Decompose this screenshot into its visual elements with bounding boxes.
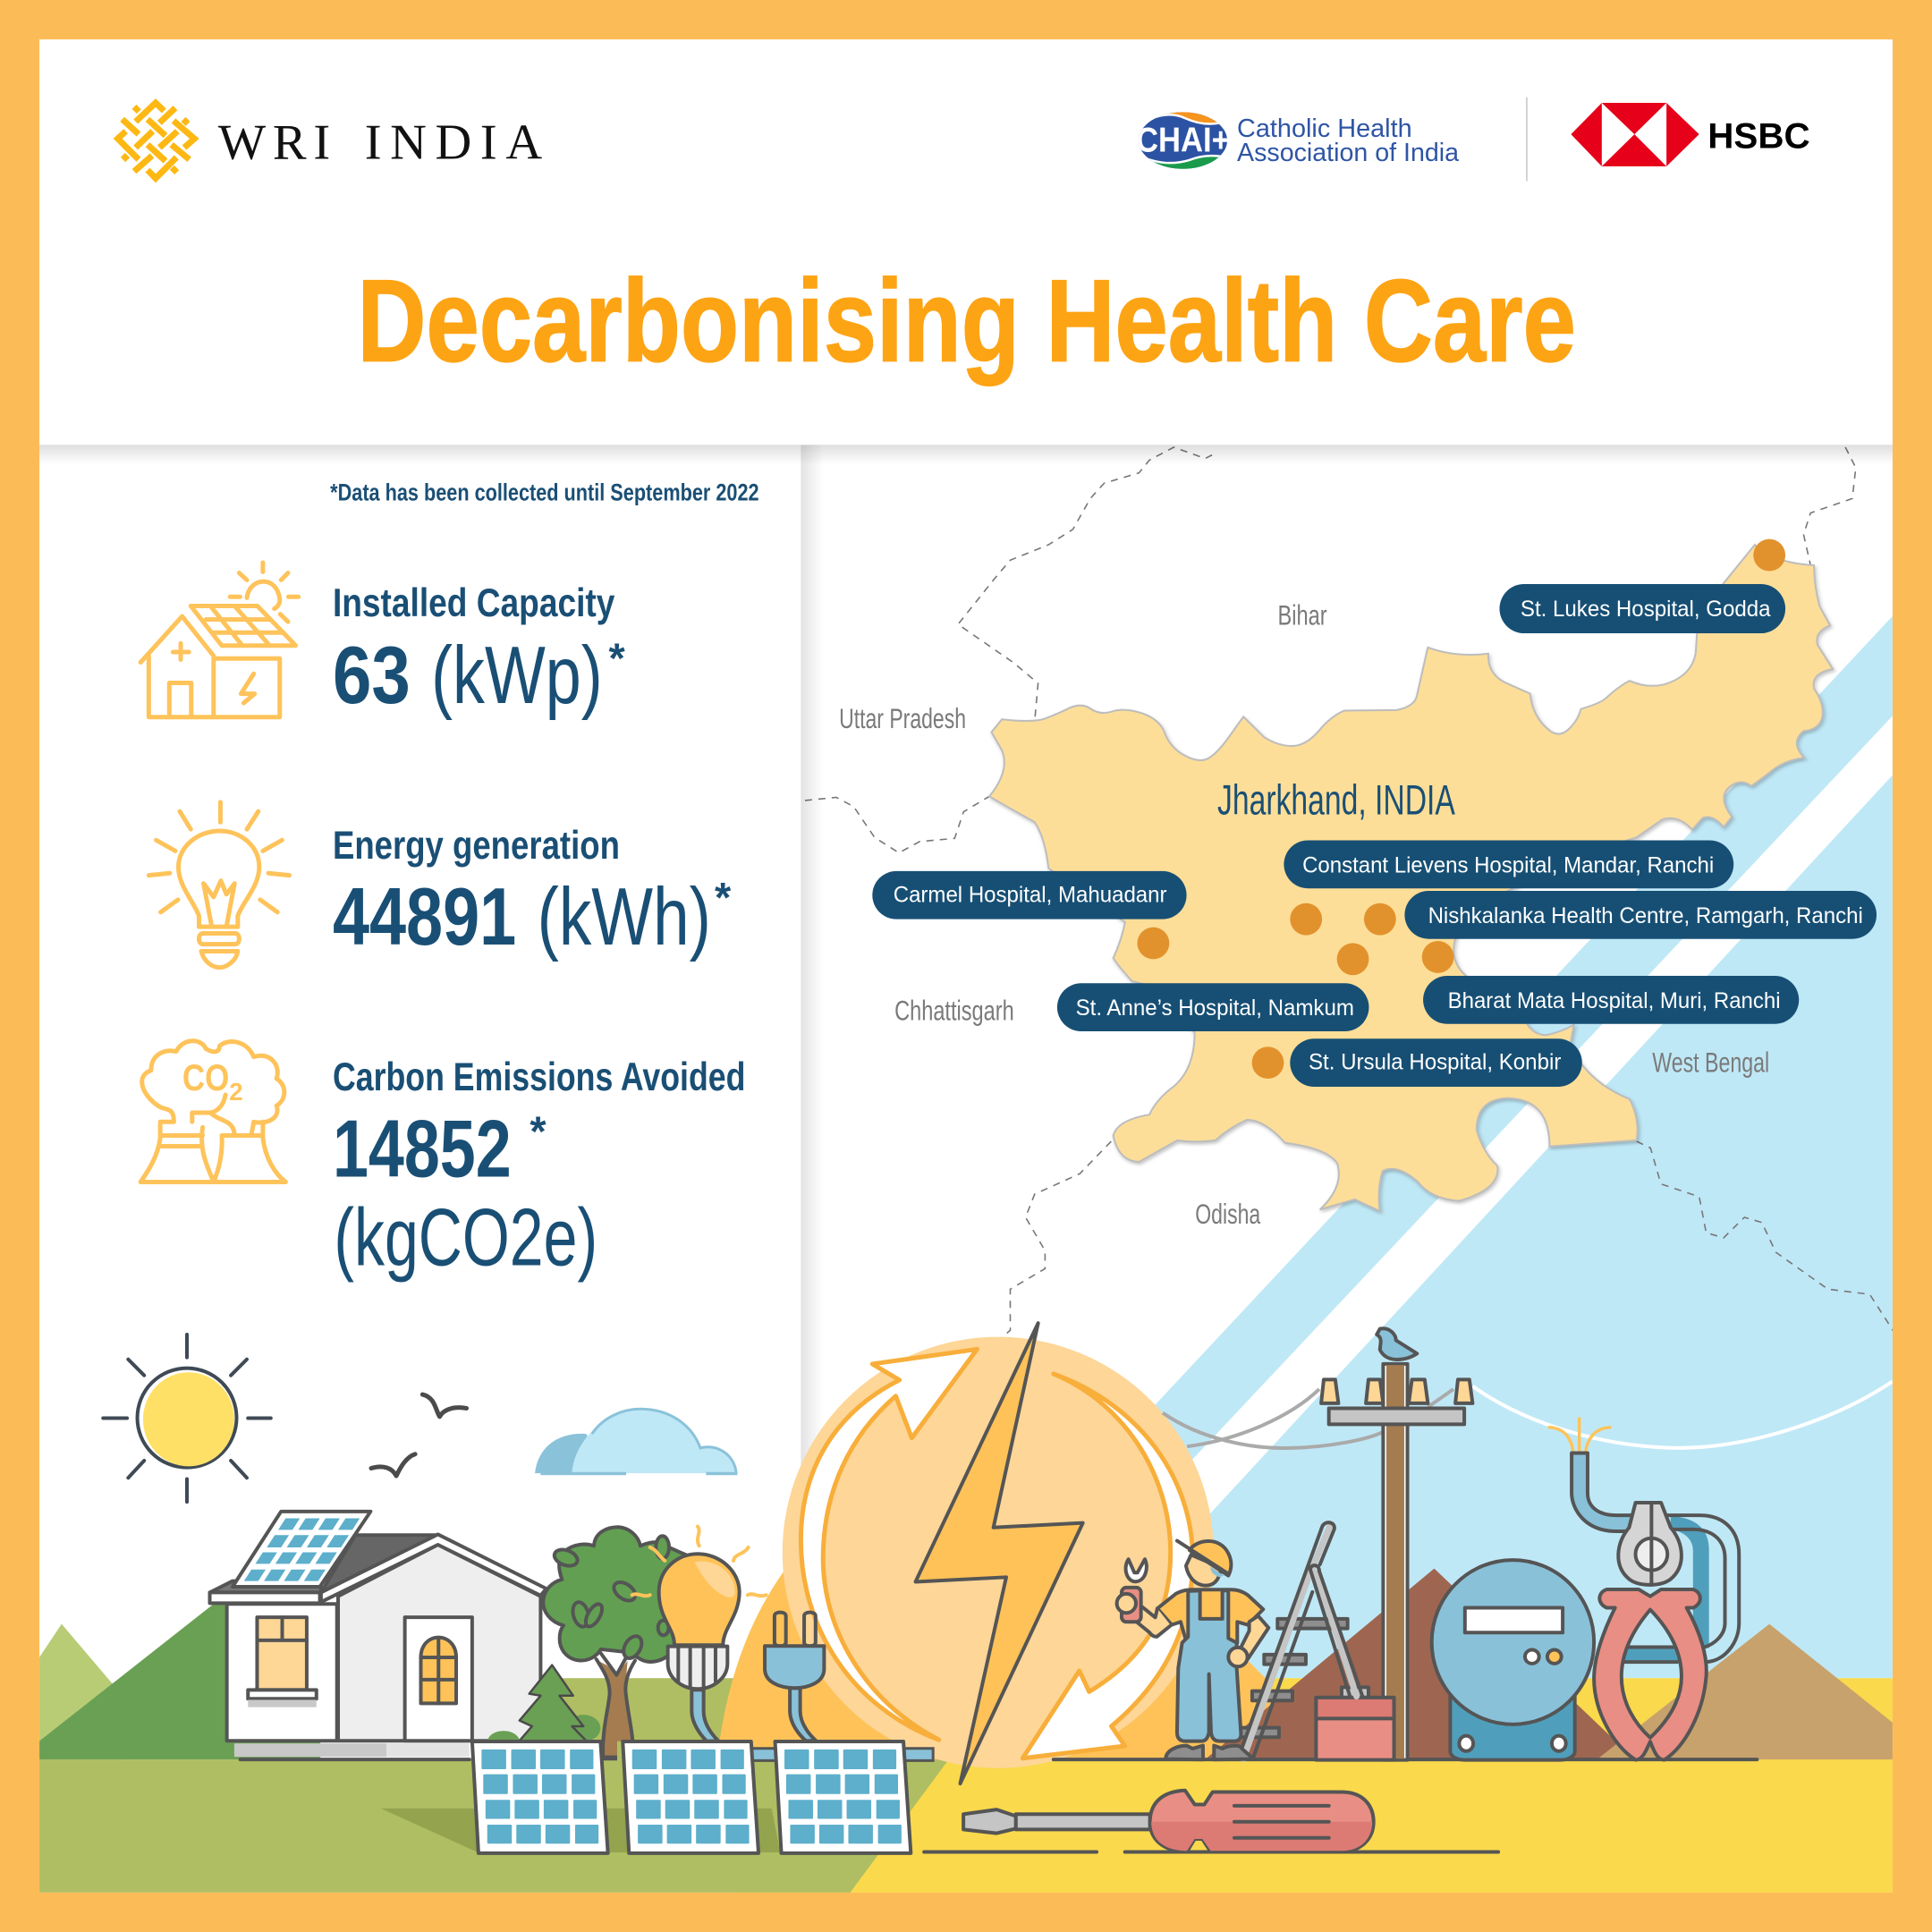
scene: orange glow behind energy circle [717,1564,1282,1759]
pill: St. Anne's Hospital: St. Anne’s Hospital, Namkum [1076,996,1354,1021]
stat: energy generation [333,823,732,962]
map: neighbouring state labels: Chhattisgarh [894,995,1014,1027]
stat: installed capacity [333,580,626,721]
panel 1 [472,1741,608,1853]
logo: WRI India: INDIA [365,114,542,170]
icon: bird on pole [1377,1328,1417,1360]
pliers [1594,1589,1707,1760]
map: neighbouring state labels: West Bengal [1652,1046,1769,1078]
cable [1572,1453,1739,1662]
small pine and bushes [487,1665,600,1752]
energy circle [783,1337,1214,1768]
stat: energy generation: Energy generation [333,823,620,868]
tree [543,1527,686,1760]
worker left arm and tool [1133,1606,1171,1637]
pill: Bharat Mata Hospital: Bharat Mata Hospital, Muri, Ranchi [1448,989,1781,1013]
screwdriver [963,1791,1374,1852]
panel 2 [623,1741,758,1853]
map: neighbouring state labels [839,598,1769,1230]
title: Decarbonising Health Care [357,256,1576,386]
header panel [39,39,1893,464]
worker shirt [1157,1589,1263,1643]
map: neighbouring state labels: Odisha [1195,1198,1261,1230]
logo: HSBC: HSBC [1707,116,1810,156]
icon: lightning bolt [916,1323,1083,1784]
icon: scene plug [765,1613,824,1741]
icon: CO2 cooling towers [140,1041,285,1182]
background: blue diagonal band [900,616,1893,1678]
map: neighbouring state labels: Bihar [1278,598,1327,631]
pill: Nishkalanka Health Centre [1404,891,1877,939]
pill: St. Ursula Hospital: St. Ursula Hospital, Konbir [1309,1051,1561,1075]
pill: Carmel Hospital [872,871,1187,919]
icon: sun [103,1335,271,1502]
cable, clamp and pliers [1549,1419,1739,1760]
stat: installed capacity: (kWp) [431,631,603,721]
stat: energy generation: * [715,874,732,920]
logo: WRI India: WRI [218,114,330,170]
electric meter [1432,1560,1594,1760]
pill: Constant Lievens Hospital: Constant Lievens Hospital, Mandar, Ranchi [1302,853,1714,877]
stat: carbon emissions avoided: * [530,1108,547,1155]
pill: Bharat Mata Hospital [1423,976,1799,1024]
pill: St. Ursula Hospital [1290,1038,1582,1087]
icon: solar house [140,563,299,717]
arrow: right circular arrow [1022,1374,1192,1758]
map: neighbouring state labels: Uttar Pradesh [839,702,966,734]
ladder [1238,1522,1362,1759]
clamp [1618,1503,1682,1585]
map: Jharkhand state shape [989,545,1833,1211]
toolbox [1316,1687,1394,1760]
logo: WRI India [118,103,542,178]
cable sparks [1549,1419,1610,1451]
stat: carbon emissions avoided: 14852 [333,1105,512,1195]
pill: St. Lukes Hospital: St. Lukes Hospital, Godda [1521,597,1771,622]
worker right arm [1241,1616,1268,1659]
logo: Catholic Health Association of India [1138,112,1460,169]
stat: installed capacity: 63 [333,631,411,721]
panel 3 [775,1741,911,1853]
stat: installed capacity: Installed Capacity [333,580,614,625]
pill: Nishkalanka Health Centre: Nishkalanka Health Centre, Ramgarh, Ranchi [1428,904,1863,928]
solar panels row [381,1741,933,1853]
pill: St. Lukes Hospital [1499,584,1785,633]
stat: carbon emissions avoided: Carbon Emissions Avoided [333,1055,745,1099]
data note: *Data has been collected until September 2022 [330,479,759,505]
worker boots [1165,1746,1254,1759]
logo: Catholic Health Association of India: Catholic Health [1237,114,1412,143]
pill: St. Anne's Hospital [1057,983,1368,1031]
stat: installed capacity: * [609,635,626,682]
worker head and hat [1186,1555,1223,1586]
house with rooftop solar [210,1512,547,1757]
background: white diagonal stripe [1058,716,1893,1602]
icon: birds [371,1394,467,1476]
stat: carbon emissions avoided [333,1055,745,1284]
map: hospital location dots [1137,539,1785,1079]
pill: Constant Lievens Hospital [1284,840,1733,888]
icon: cloud [535,1409,737,1475]
arrow: left circular arrow [801,1349,977,1740]
worker overalls [1177,1590,1241,1741]
text: CO2 in icon: CO [182,1057,229,1098]
icon: CHAI emblem: CHAI+ [1136,121,1230,159]
pill: Carmel Hospital: Carmel Hospital, Mahuadanr [894,883,1167,907]
icon: CHAI emblem [1138,112,1227,169]
map: state boundaries [805,447,1896,1348]
scene: ground [39,1678,1893,1893]
worker and ladder [1117,1522,1362,1759]
stat: carbon emissions avoided: (kgCO2e) [334,1193,597,1284]
logo: HSBC [1571,103,1810,166]
ground lines [241,1759,1757,1852]
wires [1163,1382,1893,1448]
logo: Catholic Health Association of India: Association of India [1237,139,1460,167]
icon: light bulb [148,802,289,968]
stat: energy generation: (kWh) [538,872,711,962]
icon: WRI woven diamond [118,103,194,178]
power pole with wires [1163,1328,1893,1760]
stat: energy generation: 44891 [333,872,516,962]
scene: mountains [39,1569,1893,1759]
text: CO2 in icon: 2 [229,1078,243,1106]
icon: scene light bulb [632,1527,767,1741]
map title: Jharkhand, INDIA [1217,777,1455,824]
